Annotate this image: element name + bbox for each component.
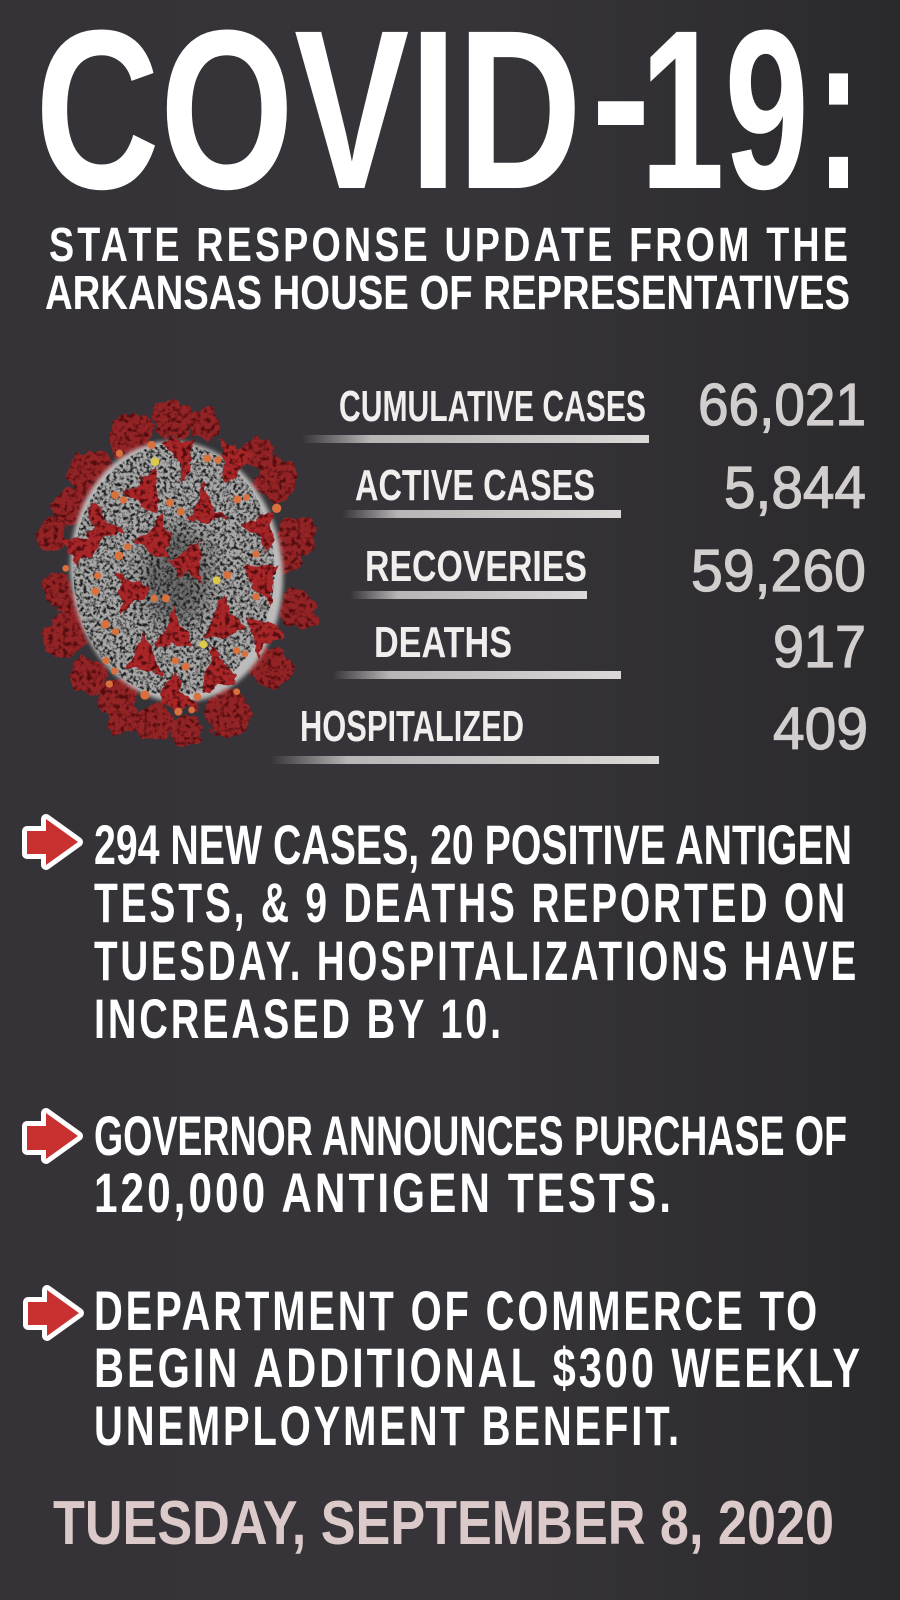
stat: recoveries: 59,260 xyxy=(691,538,866,604)
arrow 3 xyxy=(28,1290,79,1336)
arrow 2 xyxy=(27,1113,78,1159)
yellow dots xyxy=(151,457,221,648)
stat: active cases xyxy=(342,455,866,521)
text block: new cases xyxy=(94,813,859,1050)
orange dots xyxy=(62,441,281,716)
icon: coronavirus xyxy=(37,398,317,745)
stat: cumulative cases xyxy=(301,372,866,443)
stat: hospitalized: HOSPITALIZED xyxy=(300,702,524,751)
text block: governor xyxy=(94,1104,847,1224)
stat: hospitalized: 409 xyxy=(773,696,868,762)
stat: deaths: DEATHS xyxy=(374,618,512,667)
text block: governor: 120,000 ANTIGEN TESTS. xyxy=(94,1161,674,1224)
arrow 1 xyxy=(27,819,78,865)
stat: cumulative cases: CUMULATIVE CASES xyxy=(339,382,646,431)
stat: active cases: 5,844 xyxy=(724,455,866,521)
stat: hospitalized xyxy=(270,696,868,764)
stat: active cases: ACTIVE CASES xyxy=(355,461,595,510)
text block: new cases: INCREASED BY 10. xyxy=(94,987,504,1050)
stat: deaths xyxy=(332,614,866,680)
text block: commerce: UNEMPLOYMENT BENEFIT. xyxy=(94,1394,682,1457)
stat: recoveries xyxy=(350,538,866,604)
stat: recoveries: RECOVERIES xyxy=(365,542,587,591)
text block: commerce xyxy=(94,1279,863,1457)
stat: deaths: 917 xyxy=(773,614,866,680)
subtitle xyxy=(45,219,851,320)
stat: cumulative cases: 66,021 xyxy=(698,372,866,438)
